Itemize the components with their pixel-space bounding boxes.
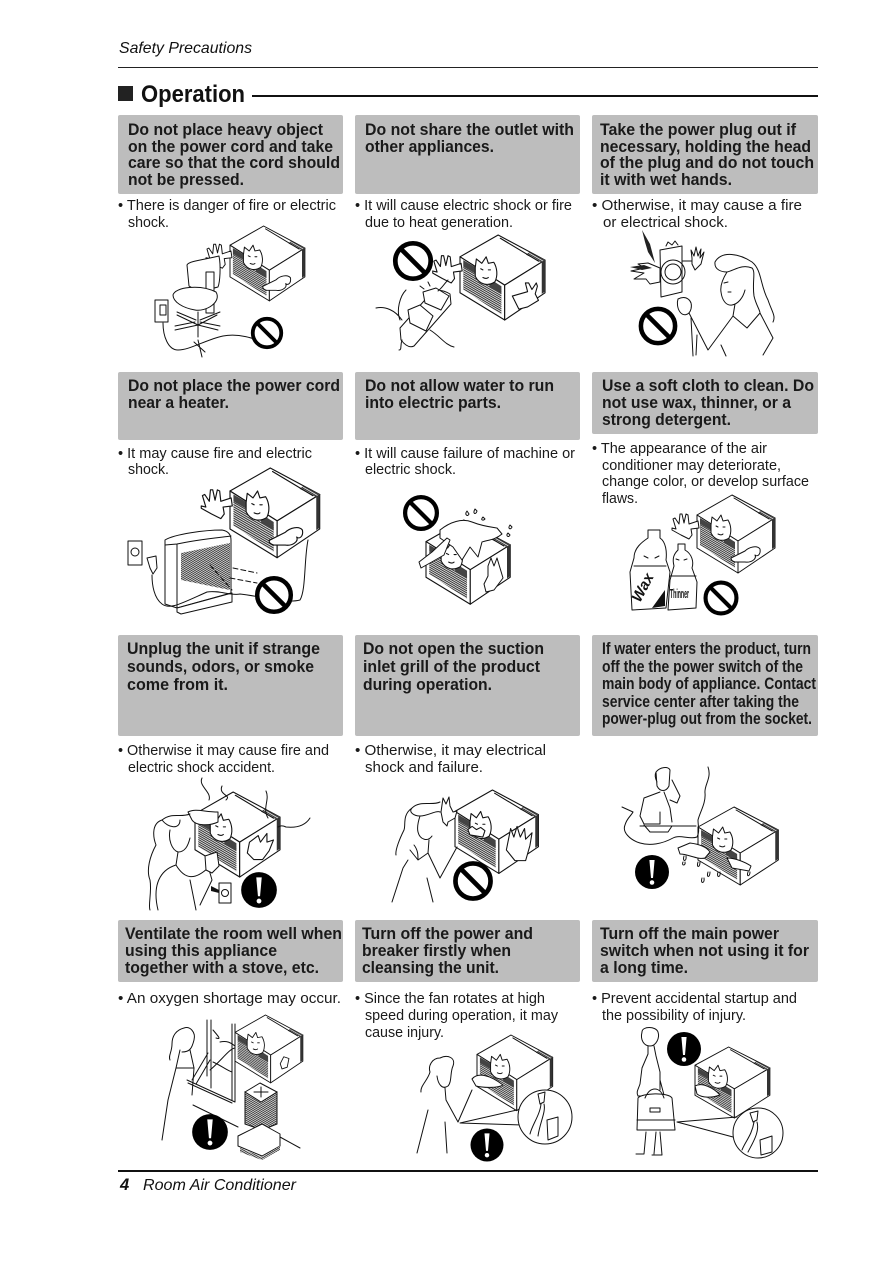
text: fan speed: cause injury. [365, 1025, 444, 1041]
panel: power plug: it with wet hands. [600, 171, 732, 189]
panel: ventilate: together with a stove, etc. [125, 959, 319, 977]
text: fire or shock: or electrical shock. [603, 215, 728, 231]
panel: share outlet: other appliances. [365, 138, 494, 156]
text: danger of fire: • There is danger of fire or electric [118, 198, 336, 214]
panel: unplug: Unplug the unit if strange [127, 640, 320, 658]
section heading: Operation: Operation [141, 81, 245, 108]
panel: share outlet [355, 115, 580, 194]
panel: water: Do not allow water to run [365, 377, 554, 395]
panel: water: into electric parts. [365, 394, 501, 412]
text: appearance [592, 441, 809, 507]
text: fire or shock: • Otherwise, it may cause a fire [592, 198, 802, 214]
running header: Safety Precautions [119, 40, 252, 57]
text: failure of machine: • It will cause failure of machine or [355, 446, 575, 462]
text: danger of fire [118, 198, 336, 231]
illustration: woman unplugging [630, 230, 774, 356]
panel: share outlet: Do not share the outlet with [365, 121, 574, 139]
panel: water enters: service center after taking the [602, 693, 799, 711]
text: heat generation: due to heat generation. [365, 215, 513, 231]
panel: soft cloth [592, 372, 818, 434]
panel: heavy object [118, 115, 343, 194]
panel: soft cloth: Use a soft cloth to clean. Do [602, 377, 814, 395]
text: fan speed: • Since the fan rotates at high [355, 991, 545, 1007]
panel: main power: a long time. [600, 959, 688, 977]
section heading: Operation [118, 81, 818, 108]
panel: heavy object: on the power cord and take [128, 138, 333, 156]
panel: unplug [118, 635, 343, 736]
panel: power plug [592, 115, 818, 194]
panel: water enters: off the the power switch of the [602, 658, 803, 676]
panel: water [355, 372, 580, 440]
text: fire and electric shock: shock. [128, 462, 169, 478]
panel: cleansing: Turn off the power and [362, 925, 533, 943]
text: shock accident [118, 743, 329, 776]
illustration: service call [622, 767, 778, 889]
text: fan speed: speed during operation, it may [365, 1008, 559, 1024]
text: fire or shock [592, 198, 802, 231]
panel: power plug: Take the power plug out if [600, 121, 796, 139]
illustration: heater and cord [128, 468, 320, 614]
panel: unplug: sounds, odors, or smoke [127, 658, 314, 676]
panel: cleansing: breaker firstly when [362, 942, 511, 960]
text: accidental startup: • Prevent accidental startup and [592, 991, 797, 1007]
panel: suction grill: during operation. [363, 676, 492, 694]
footer: 4 [119, 1176, 129, 1194]
text: appearance: • The appearance of the air [592, 441, 767, 457]
footer: Room Air Conditioner [143, 1177, 297, 1194]
illustration: opening grill [392, 790, 538, 902]
illustration: switching off [417, 1035, 572, 1161]
panel: main power: switch when not using it for [600, 942, 810, 960]
text: heat generation [355, 198, 572, 231]
text: electrical shock and failure: • Otherwise, it may electrical [355, 743, 546, 759]
panel: power plug: necessary, holding the head [600, 138, 811, 156]
illustration: chair on cord [155, 226, 305, 357]
panel: ventilate: Ventilate the room well when [125, 925, 342, 943]
panel: soft cloth: strong detergent. [602, 411, 731, 429]
panel: heavy object: care so that the cord should [128, 154, 340, 172]
panel: water enters [592, 635, 818, 736]
text: electrical shock and failure: shock and failure. [365, 760, 483, 776]
panel: suction grill: inlet grill of the product [363, 658, 540, 676]
text: appearance: conditioner may deteriorate, [602, 458, 781, 474]
illustration: shared outlet [376, 235, 545, 350]
illustration: wax and thinner [629, 495, 775, 613]
text: electrical shock and failure [355, 743, 546, 776]
panel: suction grill [355, 635, 580, 736]
panel: near a heater: near a heater. [128, 394, 229, 412]
panel: main power [592, 920, 818, 982]
text: danger of fire: shock. [128, 215, 169, 231]
panel: water enters: power-plug out from the socket. [602, 710, 812, 728]
text: heat generation: • It will cause electric shock or fire [355, 198, 572, 214]
panel: heavy object: not be pressed. [128, 171, 244, 189]
text: fan speed [355, 991, 559, 1041]
illustration: unit with water [405, 497, 512, 604]
panel: soft cloth: not use wax, thinner, or a [602, 394, 792, 412]
text: accidental startup: the possibility of injury. [602, 1008, 746, 1024]
panel: power plug: of the plug and do not touch [600, 154, 814, 172]
panel: cleansing [355, 920, 580, 982]
panel: near a heater [118, 372, 343, 440]
panel: unplug: come from it. [127, 676, 228, 694]
panel: water enters: If water enters the product, turn [602, 640, 811, 658]
text: fire and electric shock [118, 446, 312, 478]
text: oxygen shortage: • An oxygen shortage may occur. [118, 991, 341, 1007]
text: failure of machine: electric shock. [365, 462, 456, 478]
text: appearance: flaws. [602, 491, 638, 507]
text: shock accident: electric shock accident. [128, 760, 275, 776]
panel: near a heater: Do not place the power cord [128, 377, 340, 395]
text: accidental startup [592, 991, 797, 1024]
illustration: window and stove [162, 1015, 303, 1160]
text: fire and electric shock: • It may cause fire and electric [118, 446, 312, 462]
illustration: leaving with luggage [636, 1028, 783, 1158]
text: appearance: change color, or develop surface [602, 474, 809, 490]
illustration: unplugging with smoke [148, 778, 310, 910]
panel: ventilate [118, 920, 343, 982]
panel: main power: Turn off the main power [600, 925, 780, 943]
panel: water enters: main body of appliance. Contact [602, 675, 816, 693]
panel: cleansing: cleansing the unit. [362, 959, 499, 977]
panel: suction grill: Do not open the suction [363, 640, 544, 658]
panel: ventilate: using this appliance [125, 942, 277, 960]
illustration: wax and thinner: Thinner [670, 586, 689, 601]
panel: heavy object: Do not place heavy object [128, 121, 323, 139]
illustration: wax and thinner: Wax [629, 570, 658, 605]
text: failure of machine [355, 446, 575, 478]
text: shock accident: • Otherwise it may cause fire and [118, 743, 329, 759]
